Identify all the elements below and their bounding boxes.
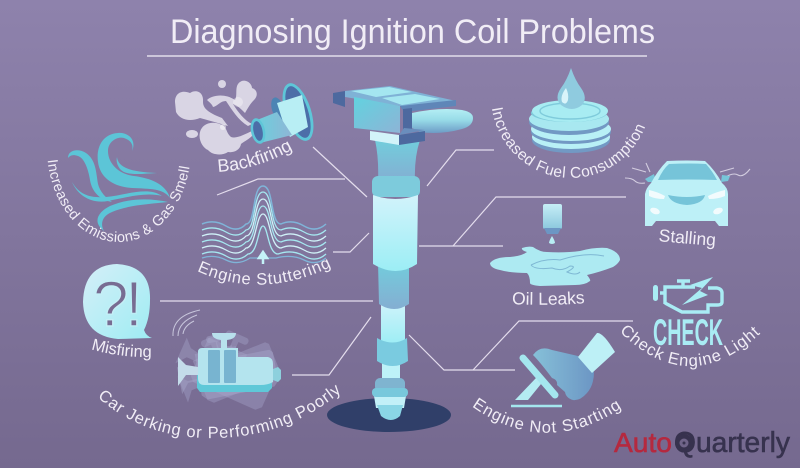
icon: engine stutter wave [202,186,326,264]
icon: car [625,160,750,226]
icon: oil drip and puddle [490,204,620,286]
engine main [178,333,281,392]
label: Engine Stuttering: Engine Stuttering [198,259,331,285]
ignition coil [327,86,473,432]
icon: speech bubble with question and exclamation [83,264,152,340]
coil lower segments [372,262,409,420]
coil upper head [333,86,473,145]
coil neck and collar [372,140,420,197]
label: Check Engine Light: Check Engine Light [622,326,760,370]
label: Misfiring: Misfiring [92,338,151,360]
label: Stalling: Stalling [659,230,715,250]
label: Increased Fuel Consumption: Increased Fuel Consumption [492,108,645,178]
icon: speech bubble with question and exclamation: ? [93,268,129,340]
car squiggles [625,163,750,183]
vibration arcs [173,310,200,336]
coil shadow [327,398,451,432]
icon: check engine light: CHECK [653,312,723,353]
title: Diagnosing Ignition Coil Problems [170,13,655,51]
logo: AutoQuarterly: Auto [614,427,672,458]
label: Engine Not Starting: Engine Not Starting [472,398,622,433]
coil body [373,195,418,271]
label: Car Jerking or Performing Poorly: Car Jerking or Performing Poorly [100,384,340,438]
label: Increased Emissions & Gas Smell: Increased Emissions & Gas Smell [48,160,190,242]
connector lines [160,147,633,375]
icon: check engine light [653,277,723,353]
engine ghosts [171,316,285,412]
icon: emission wind swirls [68,133,170,231]
icon: shaking engine [169,310,285,412]
icon: fuel drop on stacked discs [529,68,611,153]
icon: speech bubble with question and exclamation: ! [125,268,143,340]
icon: smoke and exhaust pipe [175,79,320,154]
icon: foot on pedal [511,333,615,406]
label: Oil Leaks: Oil Leaks [512,292,584,305]
logo: AutoQuarterly [614,427,790,459]
logo: AutoQuarterly: Quarterly [674,427,790,459]
label: Backfiring: Backfiring [218,142,292,172]
